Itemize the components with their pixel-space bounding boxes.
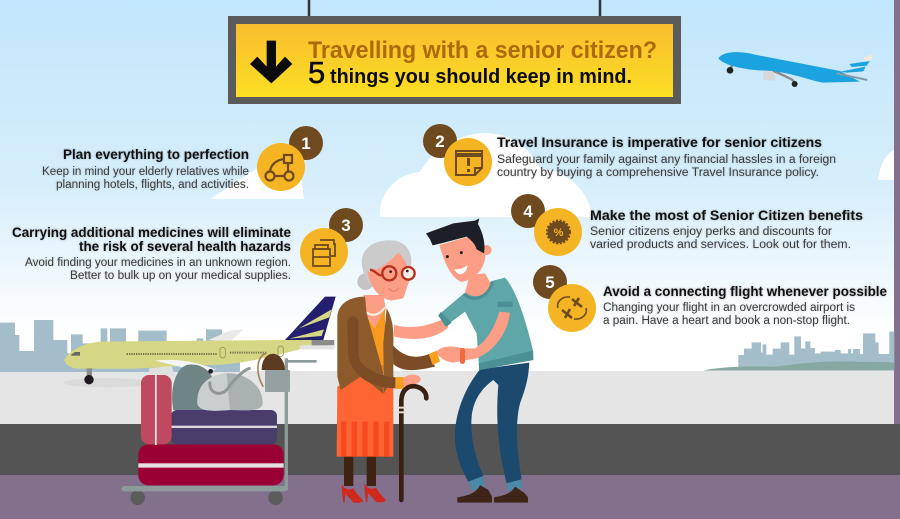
number 2: 2 xyxy=(435,132,445,151)
item 2: insurance xyxy=(423,124,836,186)
title line 2: things you should keep in mind. xyxy=(330,66,632,88)
item 3: medicines xyxy=(12,208,363,282)
luggage trolley xyxy=(122,353,317,505)
skyline: left xyxy=(0,320,240,372)
body 2 line 1: Safeguard your family against any financial hassles in a foreign xyxy=(497,154,836,166)
body 1 line 1: Keep in mind your elderly relatives while xyxy=(42,166,249,178)
background: airport ground xyxy=(0,371,900,519)
young man helping xyxy=(394,218,533,503)
heading 1: Plan everything to perfection xyxy=(63,147,249,162)
body 3 line 2: Better to bulk up on your medical supplies. xyxy=(70,270,291,282)
elderly woman with cane xyxy=(337,240,440,503)
title sign xyxy=(228,16,681,104)
body 2 line 2: country by buying a comprehensive Travel Insurance policy. xyxy=(497,167,819,179)
body 4 line 2: varied products and services. Look out for them. xyxy=(590,239,851,251)
heading 2: Travel Insurance is imperative for senior citizens xyxy=(497,135,822,150)
item 5: connecting flight xyxy=(533,265,887,332)
number 1: 1 xyxy=(301,134,311,153)
background: right purple edge xyxy=(894,0,900,425)
body 5 line 1: Changing your flight in an overcrowded airport is xyxy=(603,302,855,314)
icon: discount badge: % xyxy=(554,227,564,239)
title line 1: Travelling with a senior citizen? xyxy=(308,37,657,64)
airplane: flying xyxy=(718,52,873,87)
background: sky xyxy=(0,0,900,372)
heading 5: Avoid a connecting flight whenever possible xyxy=(603,284,887,299)
icon: down arrow xyxy=(250,41,292,83)
title line 2 number: 5 xyxy=(308,55,325,90)
body 3 line 1: Avoid finding your medicines in an unknown region. xyxy=(25,257,291,269)
parked airplane xyxy=(63,297,336,387)
heading 4: Make the most of Senior Citizen benefits xyxy=(590,208,863,223)
sign: hanging wires xyxy=(309,0,600,17)
icon: route flow xyxy=(266,155,294,180)
background: clouds xyxy=(210,133,894,217)
body 5 line 2: a pain. Have a heart and book a non-stop flight. xyxy=(603,315,850,327)
item 4: benefits xyxy=(511,194,863,256)
number 3: 3 xyxy=(341,216,351,235)
number 5: 5 xyxy=(545,273,555,292)
skyline: right xyxy=(703,332,894,371)
heading 3 line 2: the risk of several health hazards xyxy=(79,239,291,254)
item 1: plan xyxy=(42,126,323,191)
body 4 line 1: Senior citizens enjoy perks and discounts for xyxy=(590,226,832,238)
icon: medicine bottles xyxy=(313,240,335,266)
heading 3 line 1: Carrying additional medicines will eliminate xyxy=(12,225,291,240)
body 1 line 2: planning hotels, flights, and activities. xyxy=(56,179,249,191)
icon: policy document xyxy=(456,151,482,175)
icon: circling planes xyxy=(558,297,586,319)
number 4: 4 xyxy=(523,202,533,221)
icon: discount badge xyxy=(548,221,570,243)
